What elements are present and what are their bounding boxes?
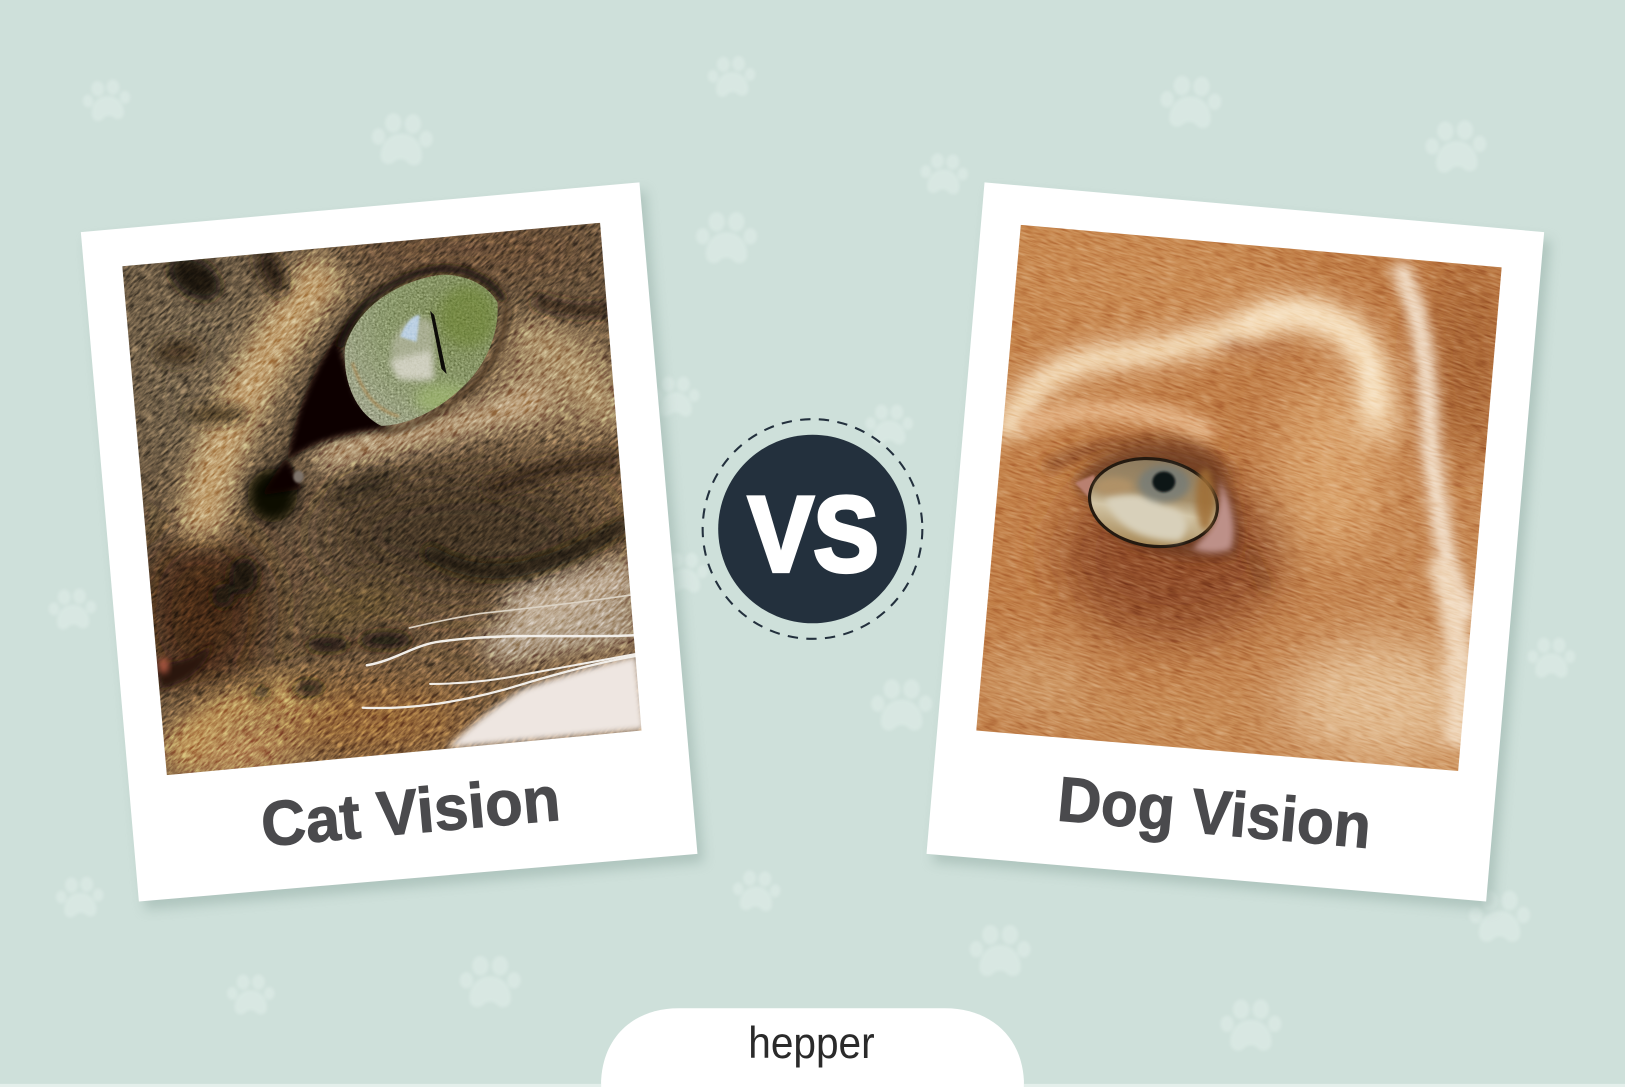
dog eye <box>1074 445 1239 558</box>
cat nose <box>155 642 212 689</box>
panel: dog vision polaroid <box>926 182 1554 914</box>
label: Dog Vision: Dog Vision <box>1055 764 1374 862</box>
photo: cat eye close-up <box>122 222 642 776</box>
photo: dog eye close-up <box>976 224 1502 771</box>
cat whiskers <box>363 595 636 708</box>
cat white chest fur <box>447 656 645 748</box>
cat dark eye corner <box>248 301 392 522</box>
panel: cat vision polaroid <box>80 182 707 913</box>
VS badge: VS <box>748 474 879 594</box>
label: Cat Vision: Cat Vision <box>258 764 563 860</box>
logo: hepper: hepper <box>748 1019 875 1068</box>
VS badge <box>703 419 922 639</box>
cat eye iris <box>340 269 506 431</box>
footer logo tab <box>0 1008 1625 1087</box>
